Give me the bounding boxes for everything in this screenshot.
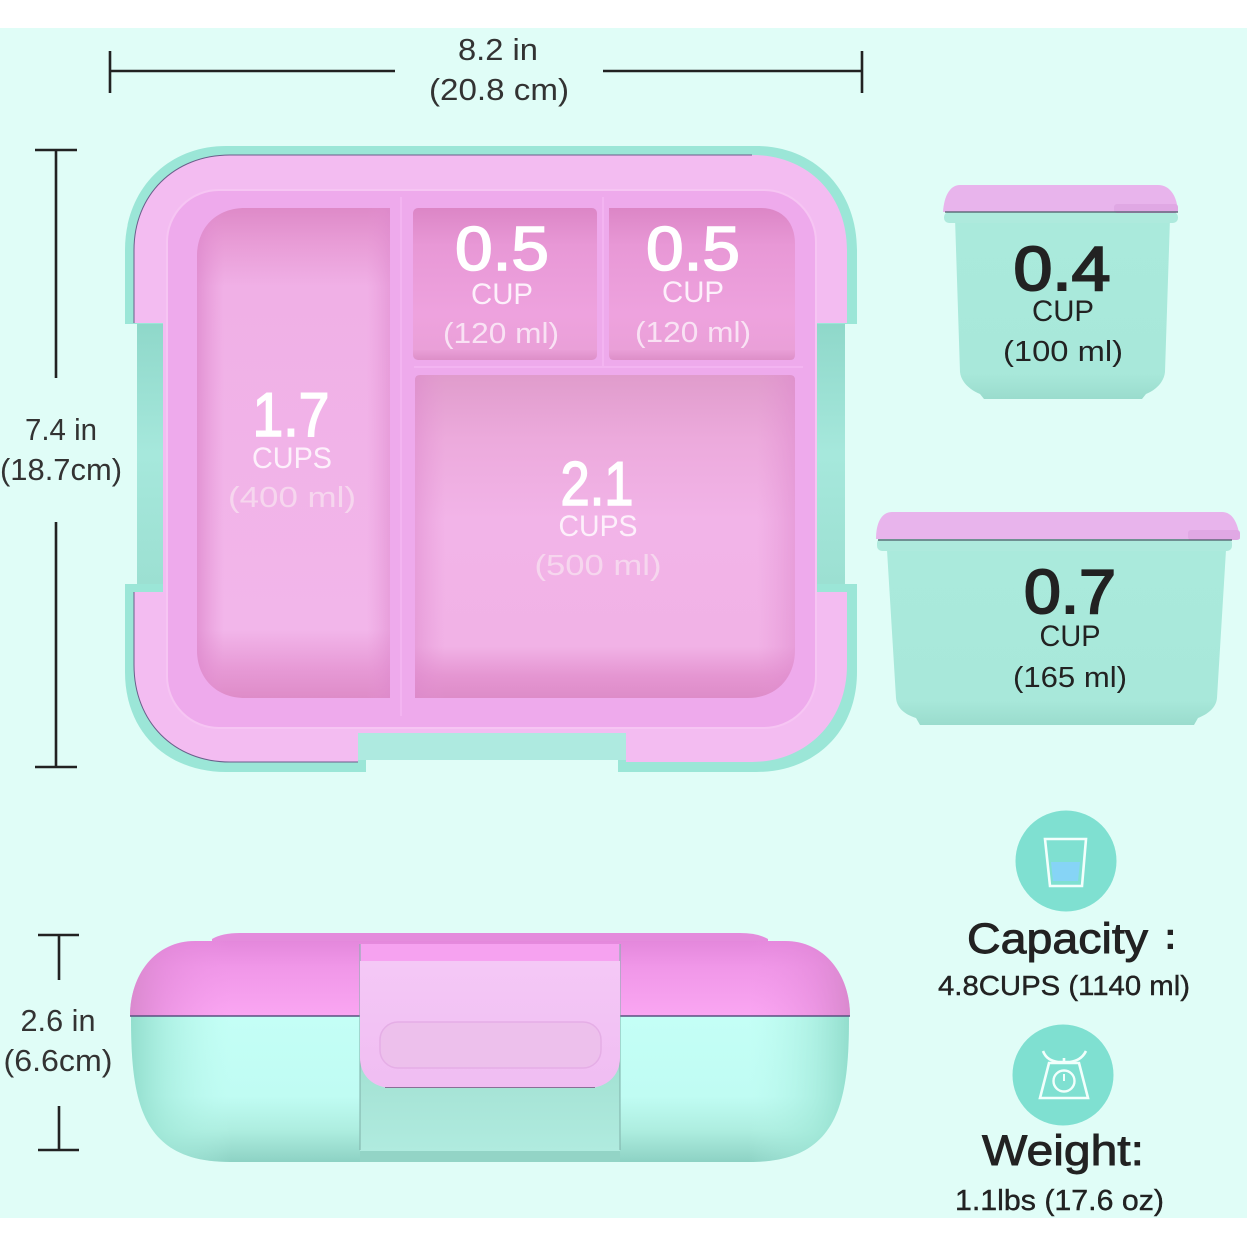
label: CUP xyxy=(1032,295,1094,328)
body xyxy=(887,550,1226,725)
lid top strip xyxy=(212,933,768,948)
label: 2.1 cups: 2.1 xyxy=(560,450,634,519)
depth dimension: 2.6 in xyxy=(20,1003,96,1038)
label: 2.1 cups: (500 ml) xyxy=(534,550,662,582)
teal base outline xyxy=(125,146,857,772)
clasp grip xyxy=(380,1022,601,1068)
lunch box top view xyxy=(125,146,857,772)
lid xyxy=(876,512,1240,539)
clasp recess xyxy=(360,1040,620,1151)
capacity text: : xyxy=(1164,916,1177,958)
label: (100 ml) xyxy=(1003,336,1123,368)
height dimension: 7.4 in xyxy=(25,412,97,447)
body xyxy=(955,218,1170,399)
label: 2.1 cups: CUPS xyxy=(558,510,638,543)
label xyxy=(1003,235,1123,368)
top middle compartment xyxy=(413,208,597,360)
width dimension: 8.2 in xyxy=(458,32,538,67)
width dimension: (20.8 cm) xyxy=(429,72,569,107)
inner rim xyxy=(167,190,816,728)
label: 0.5 cup right: (120 ml) xyxy=(635,317,751,349)
label: 0.5 cup right: CUP xyxy=(662,276,724,309)
lid shadow line xyxy=(134,155,752,762)
divider lines xyxy=(401,197,803,716)
clasp xyxy=(360,961,620,1088)
label: 0.7 xyxy=(1024,558,1116,627)
height dimension: (18.7cm) xyxy=(0,452,122,487)
weight text xyxy=(955,1127,1164,1217)
base xyxy=(131,1016,849,1162)
teal side slots xyxy=(137,324,845,760)
label: 0.5 cup left xyxy=(443,215,559,350)
pink lid frame xyxy=(134,155,847,762)
label xyxy=(1013,558,1127,694)
icon: capacity glass xyxy=(1016,810,1116,912)
icon: weight scale xyxy=(1012,1024,1114,1126)
label: 1.7 cups: (400 ml) xyxy=(228,482,356,514)
width dimension xyxy=(110,32,862,107)
large container xyxy=(876,512,1240,725)
weight text: Weight: xyxy=(982,1127,1144,1175)
label: (165 ml) xyxy=(1013,662,1127,694)
top right compartment xyxy=(609,208,795,360)
lunch box side view xyxy=(130,933,850,1162)
label: 0.5 cup left: (120 ml) xyxy=(443,318,559,350)
left compartment xyxy=(197,208,390,698)
label: 0.5 cup left: 0.5 xyxy=(455,215,549,284)
height dimension xyxy=(0,150,122,767)
label: 1.7 cups: 1.7 xyxy=(252,381,330,450)
label: 1.7 cups xyxy=(228,381,356,514)
capacity text: Capacity xyxy=(967,915,1149,963)
depth dimension: (6.6cm) xyxy=(4,1043,113,1078)
capacity text xyxy=(938,915,1190,1001)
label: CUP xyxy=(1040,620,1100,653)
label: 0.4 xyxy=(1014,235,1110,304)
small container xyxy=(943,185,1178,399)
label: 0.5 cup right xyxy=(635,215,751,349)
weight text: 1.1lbs (17.6 oz) xyxy=(955,1185,1164,1217)
depth dimension xyxy=(4,935,113,1150)
label: 2.1 cups xyxy=(534,450,662,582)
rim xyxy=(877,538,1232,551)
label: 0.5 cup left: CUP xyxy=(471,278,533,311)
label: 1.7 cups: CUPS xyxy=(252,442,332,475)
large compartment xyxy=(415,375,795,698)
capacity text: 4.8CUPS (1140 ml) xyxy=(938,970,1190,1001)
rim xyxy=(944,212,1178,223)
lid xyxy=(943,185,1178,212)
label: 0.5 cup right: 0.5 xyxy=(646,215,740,284)
lid xyxy=(130,941,850,1016)
